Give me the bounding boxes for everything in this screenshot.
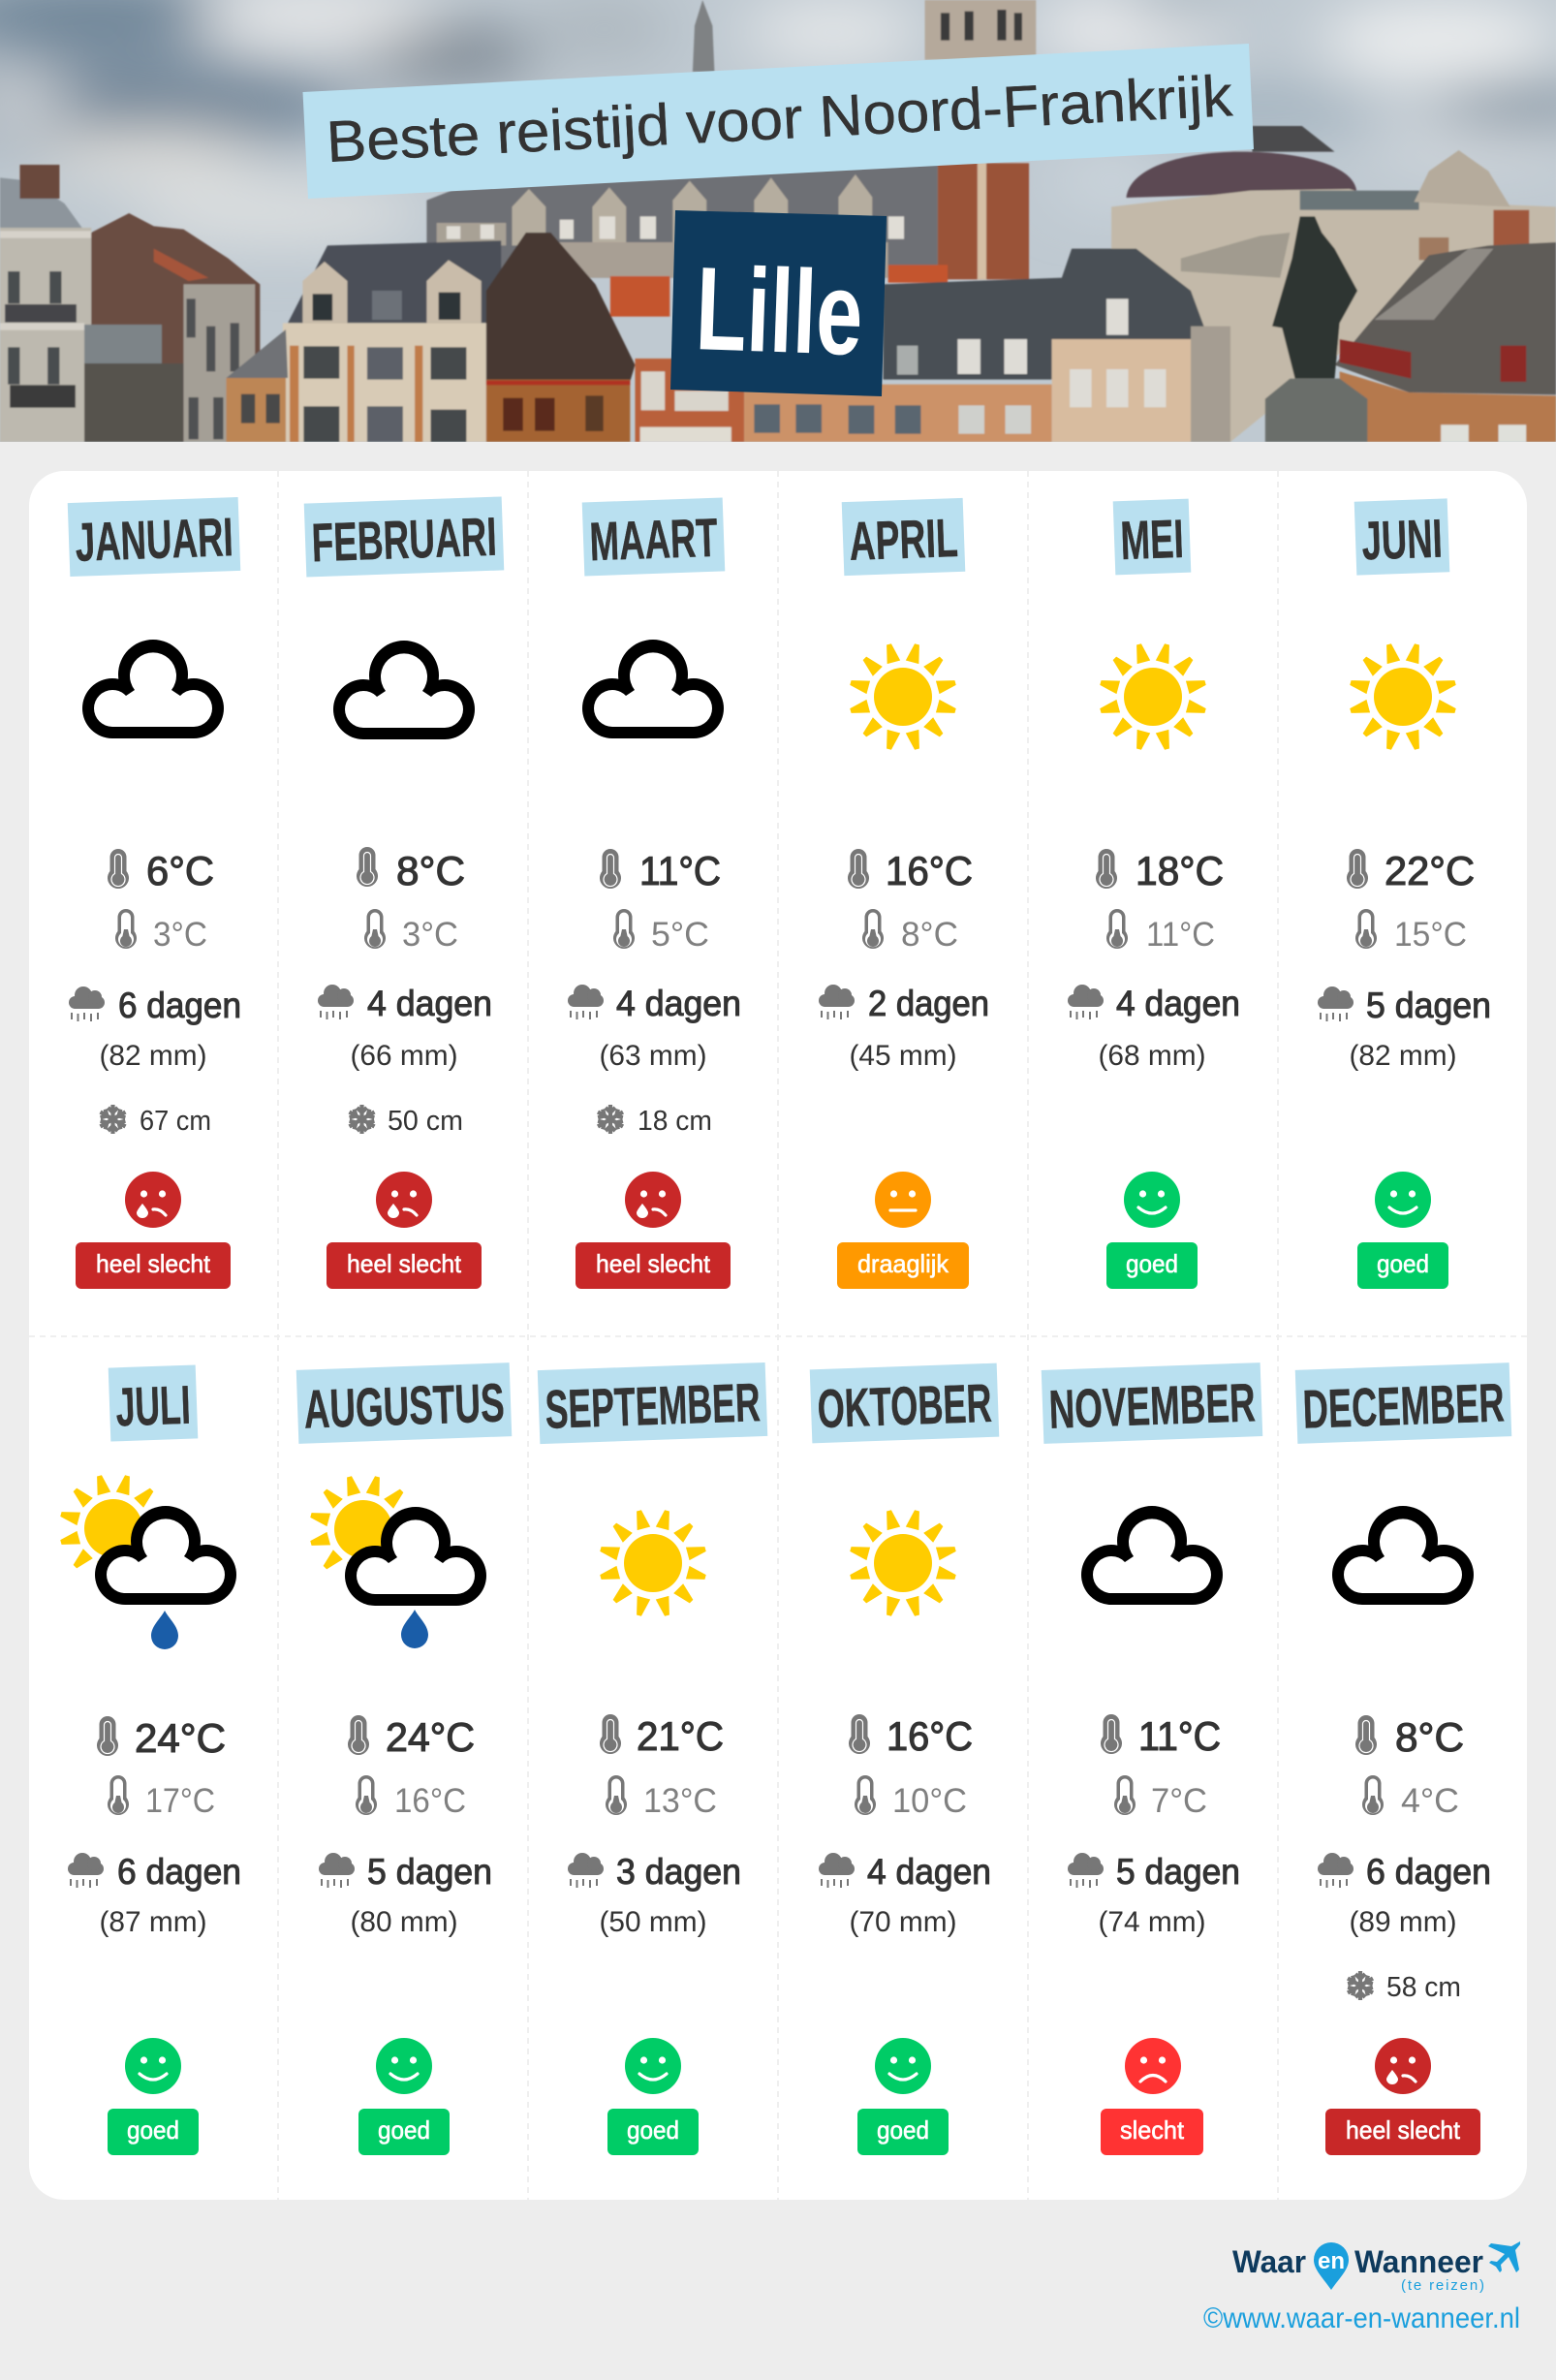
rating: goed: goed	[378, 2115, 430, 2145]
heading: maart: MAART	[589, 507, 719, 572]
low temperature	[613, 909, 709, 954]
rating: goed	[358, 2109, 450, 2155]
icon: happy face	[875, 2038, 931, 2094]
icon: sun	[599, 1509, 707, 1617]
rain days	[1068, 1852, 1240, 1892]
high temperature: 11°C	[1138, 1713, 1221, 1759]
high temperature: 8°C	[1395, 1714, 1464, 1760]
heading: juli	[109, 1364, 198, 1442]
panel: augustus	[296, 1362, 512, 2155]
rain days	[69, 986, 241, 1025]
rain days: 4 dagen	[1116, 984, 1240, 1023]
low temperature	[862, 909, 958, 954]
low temperature: 7°C	[1151, 1782, 1207, 1820]
heading: juni: JUNI	[1361, 508, 1444, 571]
rating: slecht	[1101, 2109, 1203, 2155]
low temperature: 3°C	[402, 916, 458, 954]
heading: september	[538, 1362, 767, 1444]
rainfall: (80 mm)	[351, 1906, 457, 1938]
icon: neutral face	[875, 1172, 931, 1228]
rain days: 6 dagen	[1366, 1852, 1491, 1892]
snowfall	[347, 1105, 463, 1137]
rainfall: (87 mm)	[99, 1906, 207, 1938]
high temperature	[848, 848, 973, 893]
low temperature	[1114, 1775, 1207, 1820]
icon: cloud	[1081, 1506, 1223, 1605]
heading: november: NOVEMBER	[1048, 1371, 1257, 1440]
rain days	[1068, 984, 1240, 1023]
high temperature: 11°C	[639, 848, 721, 893]
rating: heel slecht	[576, 1242, 731, 1289]
high temperature: 24°C	[386, 1714, 475, 1760]
low temperature: 11°C	[1146, 916, 1215, 954]
rating: heel slecht	[327, 1242, 482, 1289]
panel: juli	[59, 1364, 241, 2155]
heading: augustus: AUGUSTUS	[303, 1371, 506, 1440]
snowfall	[98, 1105, 211, 1137]
icon: crying face	[125, 1172, 181, 1228]
rating: draaglijk	[837, 1242, 969, 1289]
high temperature	[1096, 848, 1224, 893]
heading: februari	[304, 496, 504, 578]
low temperature	[855, 1775, 967, 1820]
icon: cloud	[1332, 1506, 1474, 1605]
rating: goed	[607, 2109, 699, 2155]
heading: januari: JANUARI	[75, 506, 234, 573]
rating: goed	[857, 2109, 949, 2155]
snowfall: 58 cm	[1386, 1972, 1461, 2003]
icon: happy face	[625, 2038, 681, 2094]
high temperature	[108, 848, 214, 893]
rating: heel slecht: heel slecht	[347, 1249, 462, 1278]
low temperature	[1106, 909, 1215, 954]
icon: sun, cloud and rain drop	[59, 1474, 236, 1649]
icon: cloud	[582, 640, 724, 738]
heading: september: SEPTEMBER	[545, 1371, 762, 1440]
city banner: Lille: Lille	[694, 242, 865, 380]
rain days: 4 dagen	[867, 1852, 991, 1892]
panel: climate card	[29, 471, 1527, 2200]
high temperature: 8°C	[396, 848, 465, 893]
rainfall: (63 mm)	[599, 1040, 707, 1072]
heading: oktober	[810, 1363, 999, 1443]
panel: mei	[1068, 499, 1240, 1289]
low temperature	[356, 1775, 466, 1820]
logo: Waar en Wanneer: Waar	[1232, 2244, 1306, 2279]
high temperature	[348, 1714, 475, 1760]
heading: november	[1042, 1362, 1262, 1444]
rating: slecht: slecht	[1120, 2115, 1185, 2145]
rating: goed: goed	[1126, 1249, 1178, 1278]
panel: april	[819, 498, 989, 1289]
rating: goed	[108, 2109, 199, 2155]
icon: crying face	[1375, 2038, 1431, 2094]
logo: Waar en Wanneer: en	[1318, 2248, 1345, 2274]
rating: draaglijk: draaglijk	[857, 1249, 949, 1278]
icon: sun, cloud and rain drop	[309, 1475, 486, 1648]
city banner: Lille	[670, 210, 887, 396]
low temperature: 4°C	[1401, 1782, 1459, 1820]
rain days: 5 dagen	[1116, 1852, 1240, 1892]
website credit: ©www.waar-en-wanneer.nl	[1203, 2302, 1520, 2334]
icon: happy face	[1375, 1172, 1431, 1228]
panel: februari	[304, 496, 504, 1289]
high temperature: 22°C	[1385, 848, 1475, 893]
panel: januari	[68, 497, 241, 1289]
rating: heel slecht: heel slecht	[96, 1249, 211, 1278]
title banner	[302, 44, 1254, 199]
rain days: 4 dagen	[616, 984, 741, 1023]
heading: augustus	[296, 1362, 512, 1444]
rain days	[68, 1852, 241, 1892]
high temperature: 21°C	[637, 1713, 724, 1759]
panel: maart	[568, 497, 741, 1289]
snowfall: 18 cm	[638, 1106, 712, 1137]
icon: cloud	[333, 641, 475, 739]
rain days: 5 dagen	[367, 1852, 492, 1892]
panel: december	[1295, 1362, 1511, 2155]
icon: sun	[1349, 642, 1457, 751]
heading: mei	[1113, 499, 1191, 575]
icon: sun	[1099, 642, 1207, 751]
logo: Waar en Wanneer	[1232, 2241, 1520, 2294]
snowfall	[1346, 1971, 1461, 2003]
heading: maart	[582, 497, 725, 576]
high temperature	[357, 847, 465, 893]
rating: goed	[1357, 1242, 1448, 1289]
rating: heel slecht: heel slecht	[1346, 2115, 1461, 2145]
rain days: 5 dagen	[1366, 986, 1491, 1025]
high temperature: 16°C	[887, 1713, 973, 1759]
low temperature: 15°C	[1394, 916, 1467, 954]
rating: goed	[1106, 1242, 1198, 1289]
low temperature: 13°C	[643, 1782, 717, 1820]
rating: goed: goed	[627, 2115, 679, 2145]
high temperature	[849, 1713, 973, 1759]
rating: heel slecht: heel slecht	[596, 1249, 711, 1278]
heading: juni	[1354, 498, 1449, 576]
low temperature	[115, 909, 207, 954]
snowfall: 67 cm	[140, 1106, 211, 1137]
rating: goed: goed	[127, 2115, 179, 2145]
title banner: Beste reistijd voor Noord-Frankrijk	[325, 63, 1234, 174]
rainfall: (70 mm)	[849, 1906, 957, 1938]
high temperature: 16°C	[886, 848, 973, 893]
icon: happy face	[376, 2038, 432, 2094]
heading: april: APRIL	[849, 507, 959, 572]
rain days	[318, 984, 492, 1023]
rain days	[819, 984, 989, 1023]
heading: oktober: OKTOBER	[817, 1372, 993, 1439]
high temperature: 18°C	[1136, 848, 1224, 893]
low temperature	[108, 1775, 215, 1820]
low temperature	[606, 1775, 717, 1820]
low temperature: 10°C	[892, 1782, 967, 1820]
panel: november	[1042, 1362, 1262, 2155]
icon: happy face	[125, 2038, 181, 2094]
low temperature: 16°C	[394, 1782, 466, 1820]
rating: heel slecht	[1325, 2109, 1480, 2155]
icon: crying face	[376, 1172, 432, 1228]
rain days: 3 dagen	[616, 1852, 741, 1892]
low temperature: 5°C	[651, 916, 709, 954]
heading: januari	[68, 497, 240, 577]
high temperature	[600, 1713, 724, 1759]
icon: sad face	[1125, 2038, 1181, 2094]
rain days: 2 dagen	[868, 984, 989, 1023]
rain days	[819, 1852, 991, 1892]
rain days: 6 dagen	[117, 1852, 241, 1892]
high temperature: 6°C	[146, 848, 214, 893]
icon: crying face	[625, 1172, 681, 1228]
low temperature: 8°C	[901, 916, 958, 954]
rainfall: (66 mm)	[351, 1040, 457, 1072]
icon: sun	[849, 1509, 957, 1617]
high temperature	[1101, 1713, 1221, 1759]
logo: Waar en Wanneer: Wanneer	[1354, 2244, 1483, 2279]
rain days: 6 dagen	[118, 986, 241, 1025]
heading: juli: JULI	[115, 1374, 192, 1437]
low temperature	[1355, 909, 1467, 954]
rainfall: (82 mm)	[1349, 1040, 1457, 1072]
low temperature: 17°C	[145, 1782, 215, 1820]
heading: april	[842, 498, 965, 576]
rain days: 4 dagen	[367, 984, 492, 1023]
high temperature	[600, 848, 721, 893]
panel: oktober	[810, 1363, 999, 2155]
icon: happy face	[1124, 1172, 1180, 1228]
heading: februari: FEBRUARI	[311, 506, 498, 573]
heading: mei: MEI	[1120, 508, 1185, 571]
icon: cloud	[82, 640, 224, 738]
rainfall: (68 mm)	[1099, 1040, 1205, 1072]
rainfall: (45 mm)	[849, 1040, 957, 1072]
low temperature: 3°C	[153, 916, 207, 954]
rating: heel slecht	[76, 1242, 231, 1289]
rainfall: (89 mm)	[1349, 1906, 1457, 1938]
low temperature	[1362, 1775, 1459, 1820]
panel: september	[538, 1362, 767, 2155]
high temperature: 24°C	[135, 1715, 226, 1761]
logo: Waar en Wanneer: (te reizen)	[1401, 2277, 1484, 2294]
snowfall	[596, 1105, 712, 1137]
rainfall: (82 mm)	[99, 1040, 207, 1072]
low temperature	[364, 909, 458, 954]
rainfall: (50 mm)	[599, 1906, 707, 1938]
rating: goed: goed	[877, 2115, 929, 2145]
rainfall: (74 mm)	[1099, 1906, 1205, 1938]
panel: juni	[1318, 498, 1491, 1289]
rating: goed: goed	[1377, 1249, 1429, 1278]
icon: sun	[849, 642, 957, 751]
high temperature	[1355, 1714, 1464, 1760]
header photo: Lille skyline	[0, 0, 1556, 442]
snowfall: 50 cm	[388, 1106, 463, 1137]
